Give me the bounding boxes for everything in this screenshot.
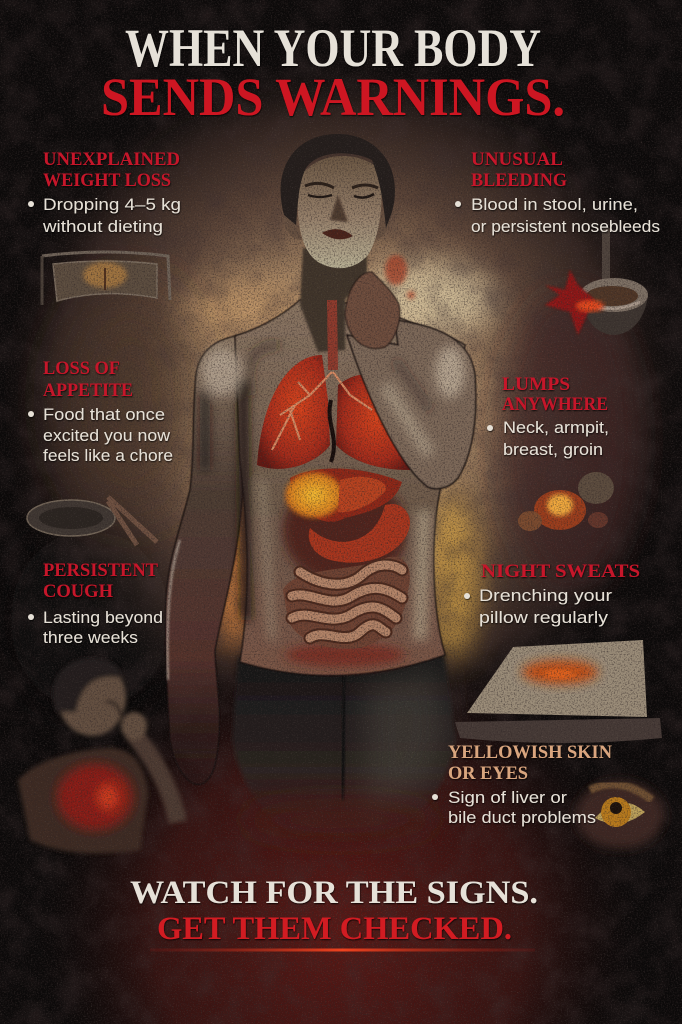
panel: persistent cough: PERSISTENT (43, 560, 158, 581)
panel: unexplained weight loss: without dieting (42, 217, 163, 236)
panel: unusual bleeding: or persistent nosebleeds (471, 217, 660, 236)
panel: night sweats (464, 561, 640, 627)
panel: yellowish skin or eyes: OR EYES (448, 763, 528, 784)
panel: yellowish skin or eyes: bile duct problems (448, 808, 596, 827)
arm highlights (385, 346, 465, 455)
panel: loss of appetite: Food that once (43, 405, 165, 424)
panel: loss of appetite: LOSS OF (43, 358, 120, 379)
footer call to action: GET THEM CHECKED. (157, 911, 512, 947)
arm rim light (168, 540, 180, 680)
icon: bathroom scale (42, 252, 170, 305)
icon: stained pillow (455, 640, 662, 743)
panel: lumps anywhere: ANYWHERE (502, 394, 608, 415)
panel: persistent cough: COUGH (43, 581, 113, 602)
panel: yellowish skin or eyes (432, 742, 612, 827)
panel: loss of appetite: APPETITE (43, 380, 133, 401)
liver (290, 468, 402, 522)
footer underline (150, 948, 535, 952)
panel: night sweats: pillow regularly (479, 608, 609, 627)
illustration: coughing man (18, 658, 178, 853)
title (101, 18, 565, 127)
head (281, 134, 395, 268)
ember accents (385, 255, 415, 299)
right arm raised to neck (347, 320, 476, 489)
panel: yellowish skin or eyes: Sign of liver or (448, 788, 567, 807)
panel: lumps anywhere: LUMPS (502, 374, 570, 395)
left arm (165, 335, 250, 784)
icon: yellow eye (576, 781, 664, 849)
lungs (257, 300, 410, 470)
panel: night sweats: NIGHT SWEATS (481, 561, 640, 582)
panel: loss of appetite (28, 358, 173, 465)
panel: loss of appetite: excited you now (43, 426, 171, 445)
panel: unexplained weight loss (28, 149, 181, 236)
panel: unusual bleeding: BLEEDING (471, 170, 567, 191)
title: SENDS WARNINGS. (101, 67, 565, 127)
panel: persistent cough: three weeks (43, 628, 138, 647)
panel: unusual bleeding (455, 149, 660, 236)
icon: empty plate and cutlery (27, 497, 157, 545)
torso shading (202, 345, 424, 667)
panel: unusual bleeding: Blood in stool, urine, (471, 195, 638, 214)
panel: unexplained weight loss: WEIGHT LOSS (43, 170, 171, 191)
panel: loss of appetite: feels like a chore (43, 446, 173, 465)
stomach (309, 504, 410, 563)
panel: lumps anywhere: Neck, armpit, (503, 418, 609, 437)
hand (345, 272, 400, 348)
panel: persistent cough (28, 560, 163, 647)
icon: toilet with blood (545, 228, 648, 335)
panel: lumps anywhere: breast, groin (503, 440, 603, 459)
panel: unexplained weight loss: Dropping 4–5 kg (43, 195, 181, 214)
footer call to action: WATCH FOR THE SIGNS. (130, 875, 538, 911)
panel: unexplained weight loss: UNEXPLAINED (43, 149, 180, 170)
neck (300, 248, 367, 352)
title: WHEN YOUR BODY (125, 18, 541, 78)
intestines (283, 557, 410, 649)
panel: night sweats: Drenching your (479, 586, 612, 605)
panel: yellowish skin or eyes: YELLOWISH SKIN (448, 742, 612, 763)
panel: unusual bleeding: UNUSUAL (471, 149, 563, 170)
footer call to action (130, 875, 538, 947)
panel: lumps anywhere (487, 374, 609, 459)
icon: lumps (518, 472, 614, 531)
torso (235, 300, 465, 675)
jeans (232, 652, 456, 850)
panel: persistent cough: Lasting beyond (43, 608, 163, 627)
main figure (165, 134, 476, 850)
